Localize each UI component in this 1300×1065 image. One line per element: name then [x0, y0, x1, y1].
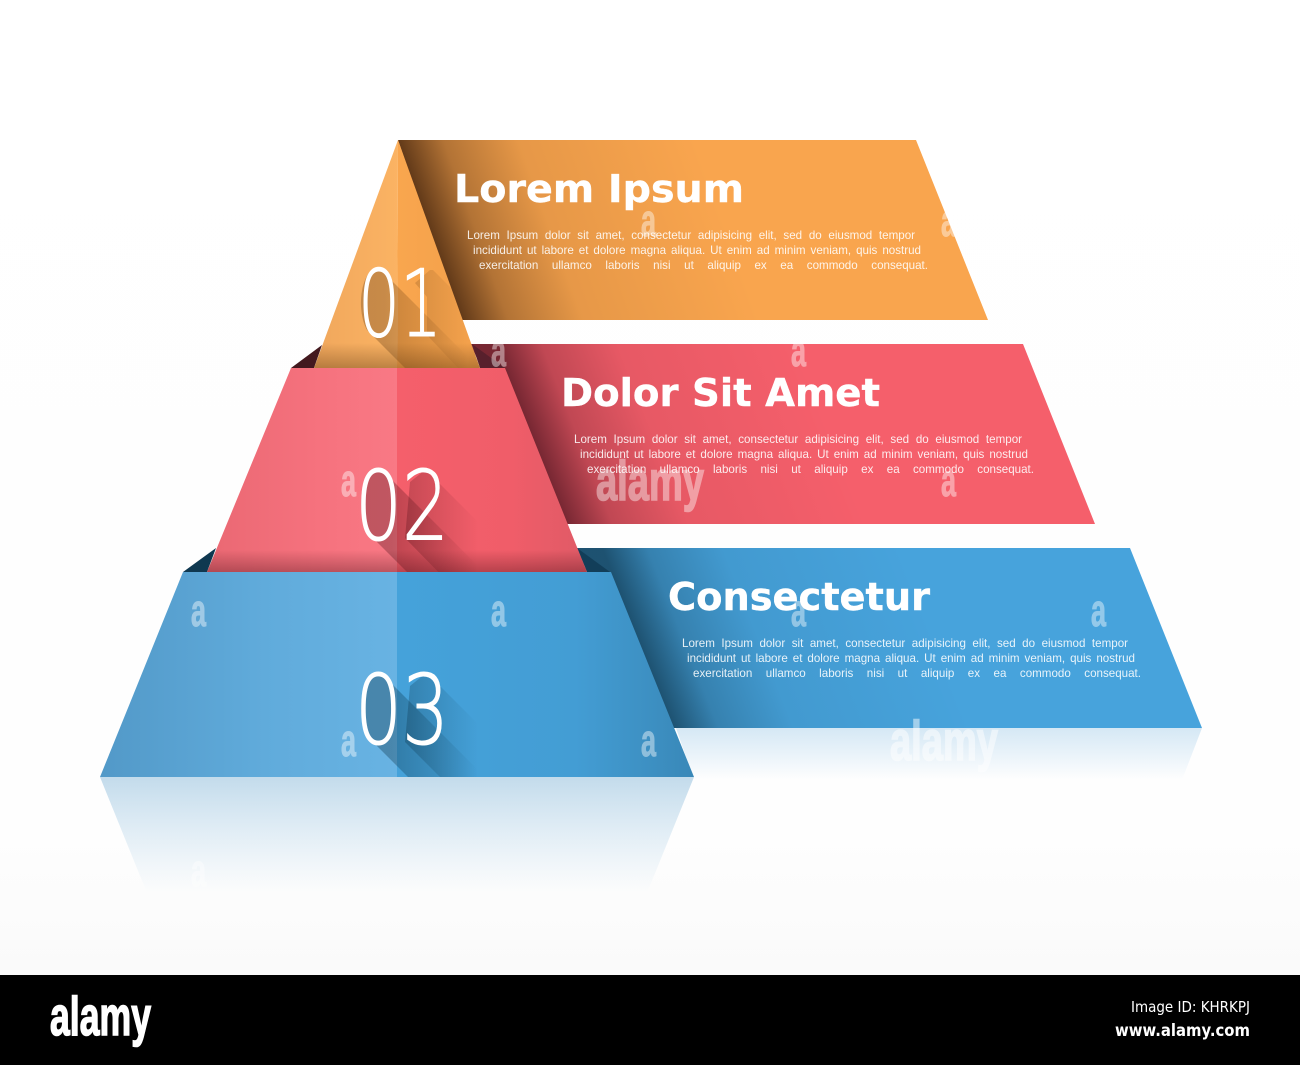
text block: banner 01: [460, 226, 940, 276]
fold shadows: tier 3: [183, 548, 610, 572]
watermarks: a: [491, 585, 507, 636]
text block: banner 03: exercitation ullamco laboris nisi ut aliquip ex ea commodo consequat.: [693, 666, 1141, 680]
watermarks: alamy: [596, 449, 704, 512]
footer logo: alamy: [50, 985, 151, 1047]
text block: banner 01: incididunt ut labore et dolore magna aliqua. Ut enim ad minim veniam, quis nostrud: [473, 244, 921, 256]
watermarks: a: [491, 325, 507, 376]
heading: Lorem Ipsum: Lorem Ipsum: [454, 167, 744, 211]
pyramid reflection: [100, 777, 694, 893]
text block: banner 02: incididunt ut labore et dolore magna aliqua. Ut enim ad minim veniam, quis nostrud: [580, 448, 1028, 460]
watermarks: a: [341, 715, 357, 766]
text block: banner 03: Lorem Ipsum dolor sit amet, consectetur adipisicing elit, sed do eiusmod tempor: [682, 636, 1128, 650]
panel: banner 03: [576, 548, 1202, 728]
watermarks: a: [1091, 585, 1107, 636]
watermarks: a: [341, 455, 357, 506]
pyramid tier 01: [314, 140, 480, 368]
text block: banner 03: incididunt ut labore et dolore magna aliqua. Ut enim ad minim veniam, quis nostrud: [687, 652, 1135, 664]
panel: banner 01: [398, 140, 988, 320]
website: www.alamy.com: [1115, 1021, 1250, 1041]
heading: Consectetur: Consectetur: [668, 575, 930, 619]
watermarks: a: [641, 715, 657, 766]
number 01: 01: [358, 250, 442, 358]
number 02: 02: [355, 450, 449, 562]
fold shadows: tier 2: [291, 344, 505, 368]
watermarks: [191, 195, 1107, 896]
text block: banner 01: Lorem Ipsum dolor sit amet, consectetur adipisicing elit, sed do eiusmod tempor: [467, 228, 915, 242]
text block: banner 02: Lorem Ipsum dolor sit amet, consectetur adipisicing elit, sed do eiusmod tempor: [574, 432, 1022, 446]
number 03: 03: [355, 654, 449, 766]
text block: banner 02: [560, 430, 1050, 480]
watermarks: alamy: [890, 709, 998, 772]
watermarks: a: [791, 325, 807, 376]
text block: banner 02: exercitation ullamco laboris nisi ut aliquip ex ea commodo consequat.: [587, 462, 1034, 476]
watermarks: a: [191, 585, 207, 636]
text block: banner 01: exercitation ullamco laboris nisi ut aliquip ex ea commodo consequat.: [479, 258, 928, 272]
watermarks: a: [941, 195, 957, 246]
panel: banner 02: [470, 344, 1095, 524]
footer bar: [0, 975, 1300, 1065]
band reflection: [676, 728, 1202, 780]
pyramid tier 02: [207, 368, 587, 572]
heading: Dolor Sit Amet: Dolor Sit Amet: [561, 371, 880, 415]
watermarks: a: [941, 455, 957, 506]
watermarks: a: [791, 585, 807, 636]
pyramid tier 03: [100, 572, 694, 777]
watermarks: a: [641, 195, 657, 246]
text block: banner 03: [670, 634, 1160, 684]
image id: Image ID: KHRKPJ: [1131, 998, 1250, 1016]
watermarks: a: [191, 845, 207, 896]
